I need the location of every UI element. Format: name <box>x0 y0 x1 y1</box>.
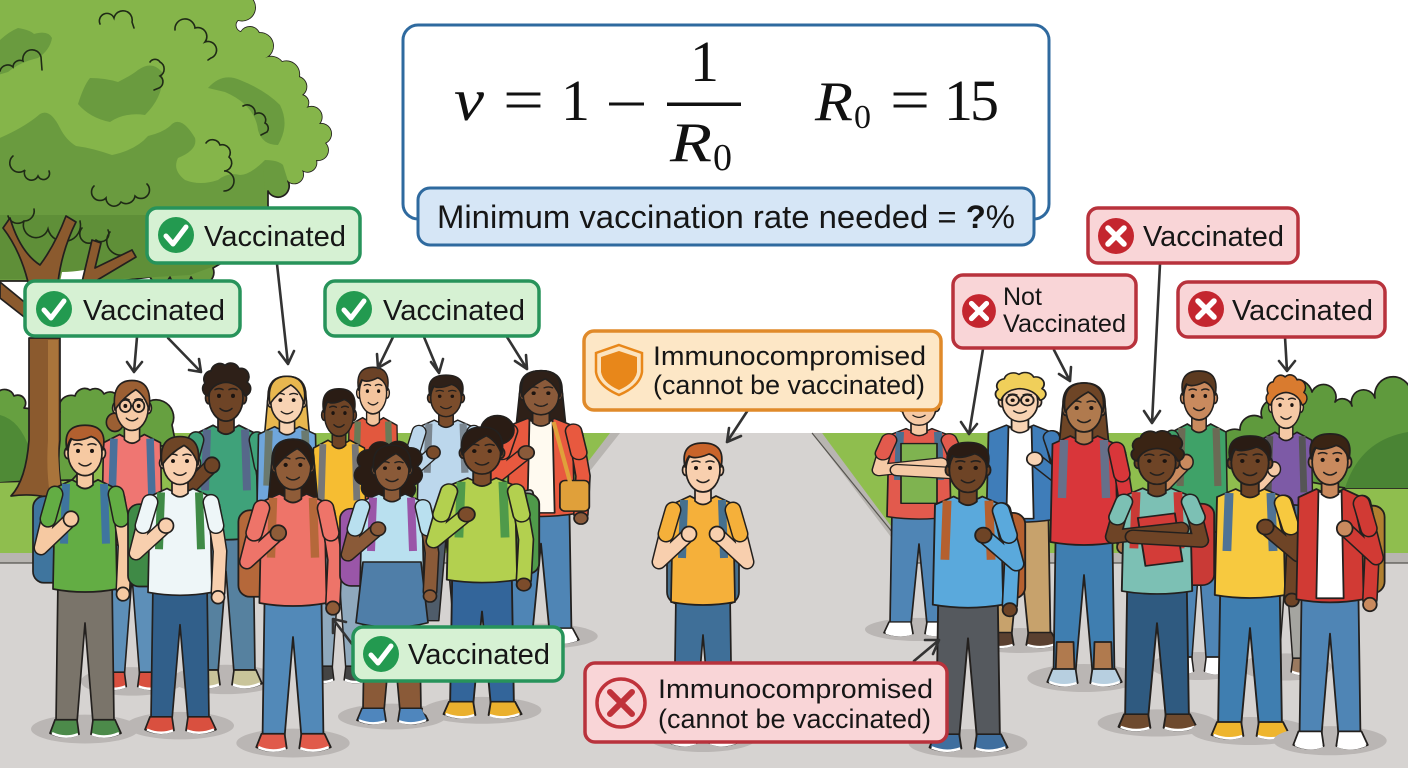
icon: hollow cross <box>597 679 645 727</box>
student: green shirt, front left <box>31 425 139 743</box>
formula: R0 = 15: 15 <box>944 68 999 133</box>
formula: v = 1 - 1/R0: 1 <box>690 29 719 94</box>
formula: R0 = 15: 0 <box>854 99 871 136</box>
label: immunocompromised red <box>585 663 947 742</box>
formula: R0 = 15 <box>814 67 999 136</box>
canopy solid lower fill <box>0 120 266 279</box>
label: vaccinated 2: Vaccinated <box>83 295 225 327</box>
label: immunocompromised orange: Immunocompromised <box>653 341 926 371</box>
student: red jacket, tan backpack <box>1273 434 1387 755</box>
label: immunocompromised orange <box>584 331 941 410</box>
label: vaccinated 4 <box>353 627 563 681</box>
tree <box>0 0 331 503</box>
label: vaccinated 2 <box>25 281 240 336</box>
formula panel <box>403 25 1049 245</box>
bushes right <box>1218 377 1408 488</box>
student: blond glasses, blue shirt <box>963 372 1077 653</box>
label: immunocompromised orange: (cannot be vaccinated) <box>653 370 925 400</box>
formula: R0 = 15: R <box>814 71 853 133</box>
canopy shadow patches <box>0 28 285 145</box>
label: vaccinated 1: Vaccinated <box>204 221 346 253</box>
student: red shirt, back row <box>347 367 399 521</box>
formula: v = 1 - 1/R0: R <box>669 112 712 174</box>
student: pink sweater long hair <box>236 439 350 757</box>
label: vaccinated 4: Vaccinated <box>408 639 550 671</box>
label: not vaccinated x top: Vaccinated <box>1143 221 1284 253</box>
student: lime shirt with hair bun <box>423 416 541 724</box>
formula: v = 1 - 1/R0 <box>454 29 741 179</box>
student: orange cardigan with satchel <box>484 371 598 649</box>
label: immunocompromised red: (cannot be vaccinated) <box>658 704 931 734</box>
answer bar: minimum vaccination rate <box>418 188 1034 245</box>
label: not vaccinated: Vaccinated <box>1003 310 1126 338</box>
student: yellow shirt boy <box>309 389 370 682</box>
student: red shirt with green book <box>865 385 973 641</box>
formula: R0 = 15: = <box>890 67 930 133</box>
bushes left <box>0 388 176 482</box>
student: long hair, red shirt <box>1027 383 1141 692</box>
label: immunocompromised red: Immunocompromised <box>658 674 933 704</box>
label: not vaccinated x right <box>1178 282 1385 337</box>
tree trunk and branches <box>0 216 136 503</box>
student: green shirt, back <box>1150 371 1248 680</box>
label: vaccinated 3: Vaccinated <box>383 295 525 327</box>
formula: v = 1 - 1/R0: 0 <box>713 137 732 179</box>
label: vaccinated 3 <box>325 281 539 336</box>
student: purple shirt <box>1240 375 1332 681</box>
arrows from labels to students <box>127 264 1295 661</box>
student: blonde girl <box>257 376 317 530</box>
student: yellow shirt, blue backpack <box>1191 436 1309 745</box>
answer bar: minimum vaccination rate: Minimum vaccination rate needed = ?% <box>437 199 1015 235</box>
student: curly girl with skirt <box>338 441 446 729</box>
formula: v = 1 - 1/R0: 1 <box>561 68 590 133</box>
icon: shield <box>596 345 642 395</box>
student: white shirt <box>126 437 234 739</box>
formula: v = 1 - 1/R0: = <box>503 67 544 133</box>
student: center immunocompromised boy <box>649 443 757 752</box>
student: curly hair, green shirt <box>172 363 280 694</box>
label: vaccinated 1 <box>147 208 360 263</box>
label: not vaccinated x top <box>1088 208 1298 263</box>
students: left group <box>31 363 598 757</box>
tree canopy <box>0 0 331 285</box>
student: glasses, salmon shirt <box>81 380 183 696</box>
label: not vaccinated <box>953 275 1136 348</box>
formula: v = 1 - 1/R0: v <box>454 67 484 133</box>
student: light blue shirt <box>406 375 486 621</box>
label: not vaccinated x right: Vaccinated <box>1232 295 1373 327</box>
label: not vaccinated: Not <box>1003 283 1042 311</box>
students: right group <box>865 371 1387 758</box>
canopy sketch lines <box>0 11 268 255</box>
student: teal shirt with red book <box>1098 431 1216 737</box>
student: blue sweater, orange backpack <box>909 442 1027 758</box>
